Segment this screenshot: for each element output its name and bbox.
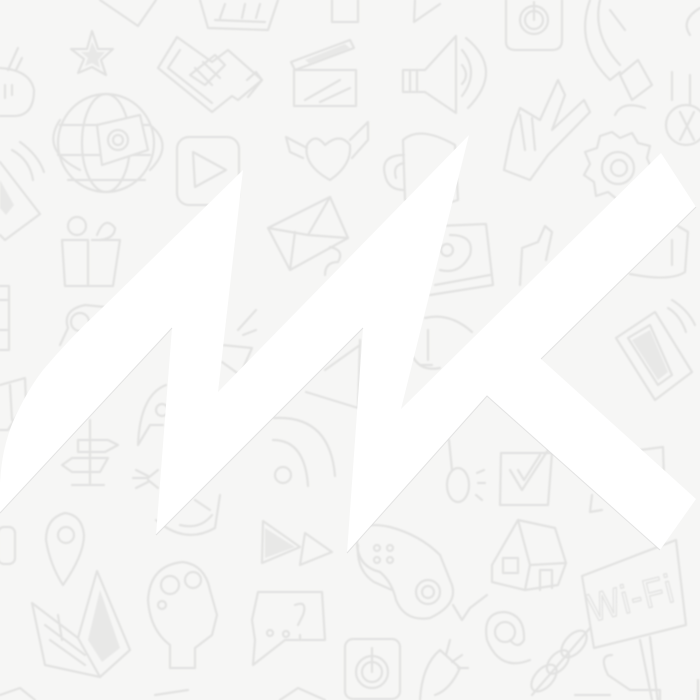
icon: gift bags <box>62 217 120 286</box>
icon: hook cable <box>575 655 660 700</box>
icon: picture frame <box>430 224 493 295</box>
icon: top edge sketches <box>100 0 440 30</box>
icon: left pill <box>0 527 15 564</box>
icon: house <box>492 520 566 590</box>
icon: power button bottom <box>345 639 400 699</box>
icon: phone with signal right <box>616 300 695 400</box>
icon: at sign <box>486 612 530 663</box>
icon: folded map left <box>0 378 26 430</box>
icon: gear <box>584 132 652 200</box>
icon: left tablet <box>0 286 9 350</box>
icon: music note <box>447 440 485 502</box>
icon: chain <box>527 626 591 696</box>
icon: sparks <box>133 470 158 488</box>
icon: globe <box>53 94 163 192</box>
icon: phone handset <box>585 0 652 115</box>
icon: phone with signal left <box>0 142 44 240</box>
icon: right box <box>590 447 664 512</box>
icon: mug <box>384 134 458 205</box>
icon: pouch <box>0 48 34 116</box>
icon: wifi sign: Wi-Fi <box>584 567 680 631</box>
icon: wifi sign <box>582 540 686 700</box>
icon: head profile <box>60 305 105 345</box>
icon: wifi waves <box>273 418 335 486</box>
icon: winged heart <box>286 122 368 180</box>
icon: speaker <box>403 36 486 113</box>
icon: medal far right <box>666 8 700 145</box>
icon: tool <box>520 226 552 285</box>
icon: star <box>71 31 113 75</box>
icon: swirl under envelope <box>325 247 340 275</box>
icon: envelope <box>268 197 348 270</box>
icon: gamepad <box>357 525 487 620</box>
icon: open book laptop <box>32 571 130 677</box>
icon: fast-forward triangles <box>262 521 332 565</box>
icon: dish <box>412 317 472 369</box>
icon: video camera <box>158 37 262 112</box>
icon: peace hand <box>504 80 590 180</box>
icon: banana <box>156 495 220 535</box>
icon: signpost <box>62 420 118 485</box>
icon: play button <box>177 137 239 205</box>
icon: bottom edge sketches <box>0 680 698 700</box>
icon: speech bubble question <box>252 592 325 665</box>
icon: map pin <box>46 513 84 585</box>
icon: plug <box>420 640 468 700</box>
icon: parrot shape <box>138 385 168 445</box>
icon: television <box>222 310 256 375</box>
icon: clapperboard <box>291 40 356 106</box>
icon: right fragment <box>630 226 688 278</box>
icon: triangle behind logo <box>306 340 360 408</box>
icon: power button top <box>506 0 562 50</box>
icon: check box <box>500 450 552 505</box>
icon: head with gears <box>148 562 217 668</box>
logo: MK mark <box>0 135 696 553</box>
